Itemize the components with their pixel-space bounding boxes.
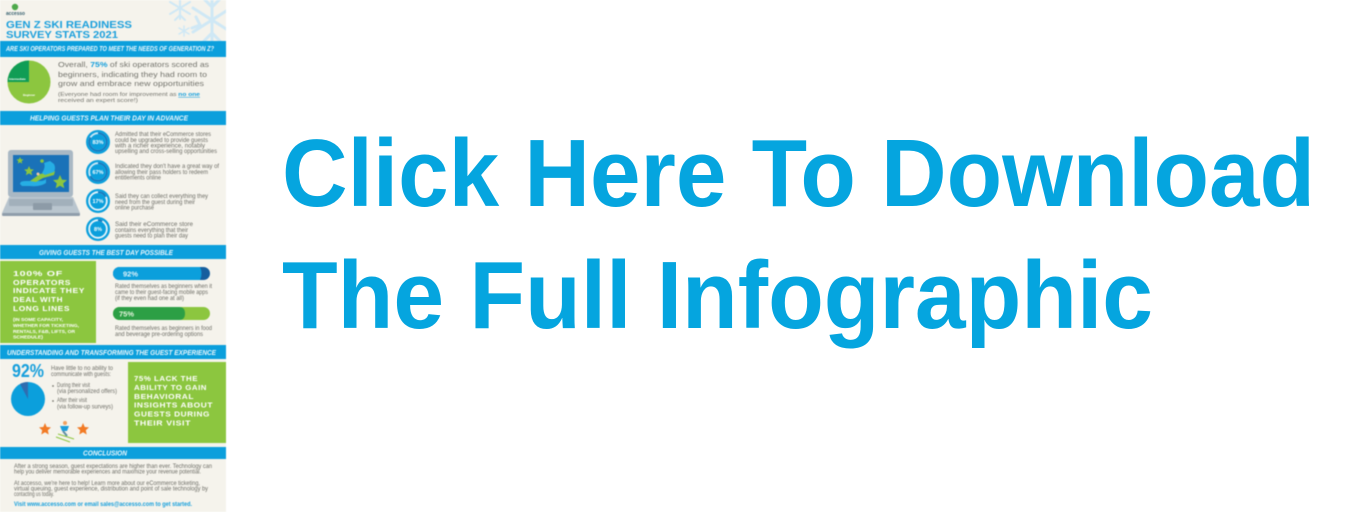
stat: 17%: Said they can collect everything they — [115, 194, 208, 200]
callout: behavioral insights: INSIGHTS ABOUT — [134, 400, 213, 410]
callout: behavioral insights: BEHAVIORAL — [134, 392, 194, 401]
bar: 75% food and beverage: 75% — [119, 310, 134, 318]
heading: download call to action — [282, 120, 1315, 349]
bar: 92% mobile apps: Rated themselves as beginners when it — [115, 284, 212, 290]
callout: long lines: OPERATORS — [13, 278, 71, 287]
text block: conclusion: help you deliver memorable experiences and maximize your revenue potential. — [14, 470, 201, 476]
bar: 92% mobile apps: (if they even had one at all) — [115, 296, 184, 302]
text block: overall score — [58, 60, 209, 104]
text block: conclusion: At accesso, we're here to help! Learn more about our eCommerce ticketing, — [14, 481, 200, 487]
bar: 75% food and beverage — [113, 307, 212, 338]
callout: long lines: DEAL WITH — [13, 295, 63, 304]
text block: overall score: Overall, 75% of ski operators scored as — [58, 60, 209, 69]
text block: mobility: During their visit — [57, 383, 90, 389]
stat: 67%: allowing their pass holders to redeem — [115, 170, 208, 176]
icon: snowflakes — [168, 0, 226, 42]
pie chart: 75% beginners: Beginner — [23, 93, 36, 97]
heading band: guest experience: UNDERSTANDING AND TRANSFORMING THE GUEST EXPERIENCE — [7, 350, 216, 357]
icon: stars and skier — [39, 421, 89, 442]
stat: 67%: 67% — [92, 170, 104, 176]
heading band: conclusion — [0, 447, 226, 459]
bar: 92% mobile apps: 92% — [123, 270, 138, 278]
stat: 83%: with a richer experience, notably — [114, 144, 205, 150]
callout: long lines: WHETHER FOR TICKETING, — [13, 323, 80, 329]
callout: long lines: (IN SOME CAPACITY, — [13, 317, 64, 323]
bar: 75% food and beverage: Rated themselves as beginners in food — [115, 326, 212, 332]
callout: long lines: SCHEDULE) — [13, 334, 43, 340]
bar: 92% mobile apps: came to their guest-facing mobile apps — [115, 290, 208, 296]
stat: 17%: 17% — [92, 199, 104, 205]
text block: conclusion: Visit www.accesso.com or email sales@accesso.com to get started. — [14, 502, 192, 508]
callout: behavioral insights: ABILITY TO GAIN — [134, 383, 207, 392]
text block: overall score: received an expert score!) — [58, 98, 138, 104]
callout: long lines: RENTALS, F&B, LIFTS, OR — [13, 329, 76, 335]
heading: download call to action: Click Here To Download — [282, 120, 1315, 227]
heading band: conclusion: CONCLUSION — [83, 450, 128, 458]
stat: 8%: 8% — [94, 227, 102, 233]
text block: conclusion — [14, 464, 212, 508]
bar: 92% mobile apps — [113, 267, 212, 302]
pie chart: 75% beginners: Intermediate — [9, 77, 26, 81]
callout: long lines: LONG LINES — [13, 304, 70, 313]
text block: mobility — [51, 366, 117, 410]
heading: download call to action: The Full Infographic — [282, 242, 1153, 349]
callout: behavioral insights: 75% LACK THE — [134, 374, 198, 383]
stat: 8%: Said their eCommerce store — [115, 222, 194, 228]
stat: 83%: could be upgraded to provide guests — [115, 138, 208, 144]
heading band: generation Z question: ARE SKI OPERATORS PREPARED TO MEET THE NEEDS OF GENERATION Z? — [5, 46, 215, 53]
title: SURVEY STATS 2021 — [6, 29, 118, 41]
text block: conclusion: contacting us today. — [14, 492, 54, 498]
callout: long lines: INDICATE THEY — [13, 286, 85, 295]
text block: mobility: After their visit — [57, 398, 87, 404]
stat: 83%: Admitted that their eCommerce stores — [115, 132, 211, 138]
panel: infographic thumbnail — [0, 0, 231, 512]
heading band: best day — [0, 245, 226, 259]
callout: long lines — [0, 261, 96, 343]
text block: mobility: (via follow-up surveys) — [57, 404, 113, 410]
text block: mobility: communicate with guests: — [51, 372, 111, 378]
stat: 83%: 83% — [92, 140, 104, 146]
heading band: plan their day: HELPING GUESTS PLAN THEIR DAY IN ADVANCE — [30, 116, 188, 122]
callout: behavioral insights — [128, 362, 226, 443]
heading band: plan their day — [0, 111, 226, 125]
stat: 17%: online purchase — [115, 206, 155, 212]
pie chart: 75% beginners — [8, 60, 50, 104]
stat: 8% — [86, 217, 194, 241]
text block: overall score: beginners, indicating they had room to — [58, 70, 207, 79]
text block: conclusion: virtual queuing, guest experience, distribution and point of sale technology by — [14, 486, 208, 492]
heading band: guest experience — [0, 345, 226, 359]
bar: 75% food and beverage: and beverage pre-ordering options — [115, 332, 203, 338]
heading band: best day: GIVING GUESTS THE BEST DAY POSSIBLE — [39, 250, 173, 257]
text block: conclusion: After a strong season, guest expectations are higher than ever. Technology can — [14, 464, 212, 470]
stat: 17%: need from the guest during their — [115, 200, 195, 206]
stat: 67%: Indicated they don't have a great way of — [115, 164, 219, 170]
stat: 67% — [86, 160, 219, 184]
text block: mobility: (via personalized offers) — [57, 389, 117, 395]
pie chart: 92% — [11, 382, 45, 416]
stat: 17% — [86, 189, 208, 213]
stat: 83%: upselling and cross-selling opportunities — [115, 149, 217, 155]
stat: 83% — [86, 130, 217, 155]
stat: 67%: entitlements online — [115, 176, 162, 182]
logo: accesso — [6, 4, 26, 17]
title: GEN Z SKI READINESS — [6, 19, 132, 31]
callout: long lines: 100% OF — [13, 269, 63, 278]
callout: behavioral insights: THEIR VISIT — [134, 418, 191, 428]
text block: overall score: (Everyone had room for improvement as no one — [58, 92, 200, 98]
text block: overall score: grow and embrace new opportunities — [58, 79, 204, 88]
icon: laptop with snowboarder — [2, 150, 80, 216]
logo: accesso: accesso — [6, 11, 26, 17]
heading band: generation Z question — [0, 41, 226, 57]
stat: 8%: guests need to plan their day — [115, 234, 188, 240]
stat: 92%: 92% — [12, 361, 44, 381]
title — [6, 19, 132, 41]
callout: behavioral insights: GUESTS DURING — [134, 410, 210, 418]
stat: 8%: contains everything that their — [115, 228, 188, 234]
text block: mobility: Have little to no ability to — [51, 366, 114, 372]
